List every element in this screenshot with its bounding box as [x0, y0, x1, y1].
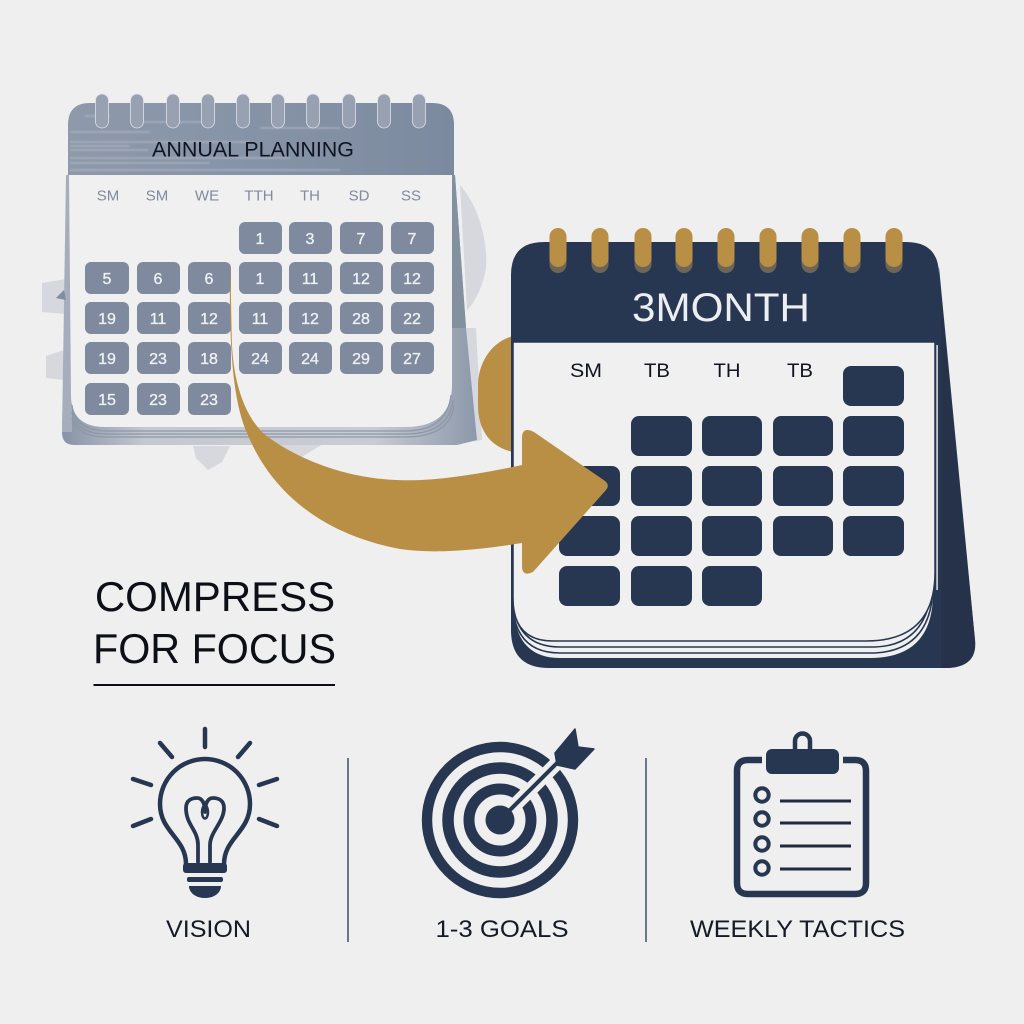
page stack lines [72, 395, 454, 437]
gold tab behind calendar [478, 336, 513, 452]
date numbers: 24 [251, 351, 269, 368]
date numbers: 27 [403, 351, 421, 368]
weekday labels: SM [146, 188, 168, 204]
date numbers: 23 [200, 392, 218, 409]
date numbers: 1 [256, 271, 265, 288]
date numbers: 22 [403, 311, 421, 328]
annual page [69, 175, 452, 427]
date numbers: 29 [352, 351, 370, 368]
weekday labels: TB [644, 360, 670, 382]
date numbers: 11 [302, 271, 318, 288]
annual planning calendar [42, 94, 486, 470]
annual header band [68, 103, 454, 175]
icon: lightbulb [133, 729, 277, 898]
date numbers: 18 [200, 351, 218, 368]
page stack lines [513, 343, 937, 653]
label: goals: 1-3 GOALS [436, 916, 568, 943]
heading: COMPRESS [95, 573, 335, 620]
weekday labels: SD [349, 188, 370, 204]
weekday labels: TH [300, 188, 320, 204]
date numbers: 28 [352, 311, 370, 328]
calendar page [513, 342, 935, 641]
date numbers: 6 [154, 271, 163, 288]
weekday labels: SM [570, 360, 602, 382]
annual title: ANNUAL PLANNING [152, 138, 354, 162]
date numbers: 15 [98, 392, 116, 409]
date numbers: 12 [301, 311, 319, 328]
date blocks [559, 366, 904, 606]
page stack [513, 400, 933, 658]
weekday labels: SS [401, 188, 421, 204]
date numbers: 19 [98, 311, 116, 328]
icon: target [427, 729, 594, 893]
date numbers: 1 [256, 231, 265, 248]
date numbers: 19 [98, 351, 116, 368]
date numbers: 23 [149, 351, 167, 368]
date numbers: 7 [357, 231, 366, 248]
weekday labels: TH [714, 360, 740, 382]
weekday labels [97, 188, 421, 204]
heading [93, 573, 336, 672]
header brush streaks [70, 116, 340, 170]
rings [96, 94, 426, 128]
date numbers: 5 [103, 271, 112, 288]
calendar header [511, 242, 939, 342]
date numbers: 3 [306, 231, 315, 248]
faded paper scraps [42, 185, 486, 470]
weekday labels: SM [97, 188, 119, 204]
month title: 3MONTH [632, 286, 810, 330]
date numbers [98, 231, 421, 409]
weekday labels: TB [787, 360, 813, 382]
calendar stand and base [511, 267, 975, 668]
arrow: compress [230, 262, 608, 574]
date numbers: 7 [408, 231, 417, 248]
heading rule [94, 684, 335, 686]
divider [645, 758, 647, 942]
date numbers: 12 [200, 311, 218, 328]
date numbers: 11 [150, 311, 166, 328]
date numbers: 6 [205, 271, 214, 288]
icon: clipboard [737, 734, 866, 894]
date cells [85, 222, 434, 415]
3 month calendar [511, 228, 975, 668]
calendar back and stand [62, 175, 477, 445]
weekday labels: WE [195, 188, 219, 204]
date numbers: 11 [252, 311, 268, 328]
date numbers: 23 [149, 392, 167, 409]
date numbers: 12 [403, 271, 421, 288]
label: vision: VISION [166, 916, 251, 943]
date numbers: 24 [301, 351, 319, 368]
weekday labels: TTH [244, 188, 274, 204]
weekday labels [570, 360, 813, 382]
divider [347, 758, 349, 942]
gold rings [550, 228, 902, 273]
label: weekly tactics: WEEKLY TACTICS [690, 916, 905, 943]
date numbers: 12 [352, 271, 370, 288]
heading: FOR FOCUS [93, 625, 336, 672]
